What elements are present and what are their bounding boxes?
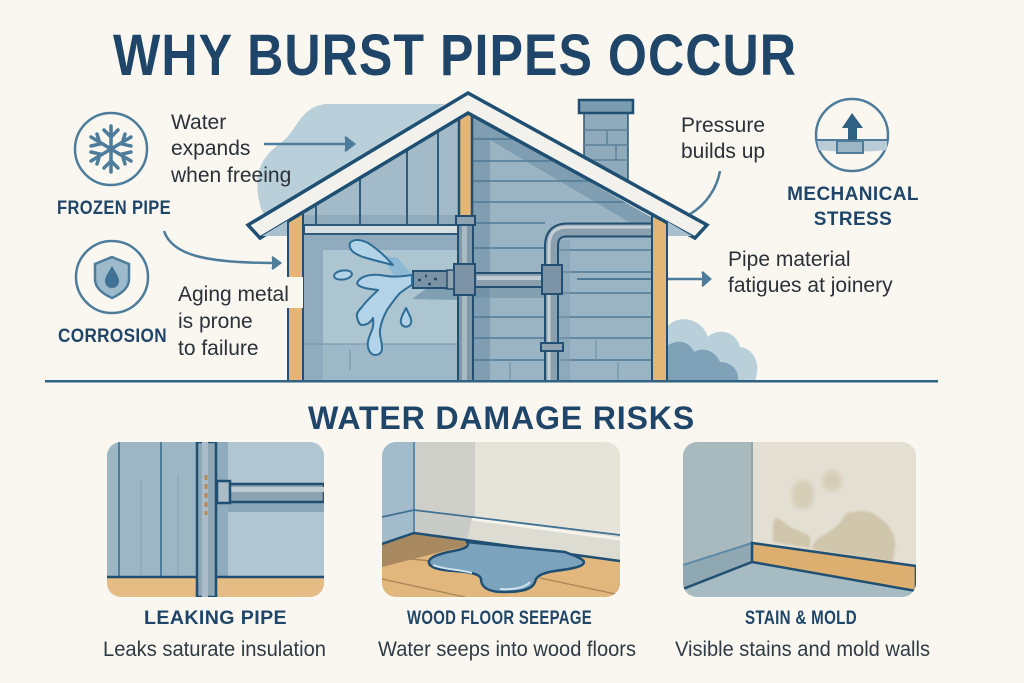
panel: leaking pipe [107, 442, 324, 597]
label: mechanical stress: STRESS [814, 209, 892, 230]
background cloud behind house [257, 104, 445, 218]
callout arrow: frozen pipe to wall [164, 231, 280, 269]
horizontal and elbow pipe [413, 227, 651, 381]
callout text: water expands: Water [171, 111, 226, 134]
left stud [288, 212, 303, 381]
callout text: pipe material: Pipe material [728, 248, 851, 271]
caption: wood floor seepage: Water seeps into wood floors [378, 638, 636, 661]
right stud [652, 216, 667, 381]
vertical pipe [454, 216, 475, 381]
panel: wood floor seepage [382, 442, 620, 597]
callout text: pressure builds up: builds up [681, 140, 765, 163]
panel: stain and mold [683, 442, 916, 597]
label: mechanical stress: MECHANICAL [787, 184, 919, 205]
label: frozen pipe: FROZEN PIPE [57, 198, 171, 219]
callout text: water expands: expands [171, 137, 250, 160]
callout arrow: water expands [264, 137, 354, 151]
left room wall [303, 233, 458, 381]
caption: stain and mold: Visible stains and mold walls [675, 638, 930, 661]
heading: water damage risks: WATER DAMAGE RISKS [308, 400, 695, 436]
callout text: aging metal: to failure [178, 337, 259, 360]
callout arrow: pressure [690, 171, 720, 214]
label: corrosion: CORROSION [58, 326, 167, 347]
wall gap behind aging metal label [276, 277, 303, 308]
label: leaking pipe: LEAKING PIPE [144, 608, 287, 629]
callout text: aging metal: is prone [178, 310, 253, 333]
wood floor [107, 578, 324, 597]
label: stain and mold: STAIN & MOLD [745, 608, 857, 629]
callout arrow: pipe material [668, 272, 710, 286]
shrub [667, 319, 757, 381]
callout text: aging metal: Aging metal [178, 283, 289, 306]
wood floor [382, 533, 620, 597]
icon: snowflake [75, 113, 147, 185]
callout text: pressure builds up: Pressure [681, 114, 765, 137]
center stud [459, 114, 472, 226]
house [248, 90, 707, 385]
icon: water burst [333, 240, 412, 355]
house walls [303, 113, 651, 381]
icon: mechanical stress [816, 99, 888, 171]
icon: corrosion shield [76, 241, 148, 313]
puddle [429, 542, 584, 592]
right side panels [472, 100, 651, 385]
ground line [45, 380, 938, 382]
attic studs [316, 130, 438, 224]
left attic [304, 122, 458, 215]
label: wood floor seepage: WOOD FLOOR SEEPAGE [407, 608, 592, 629]
caption: leaking pipe: Leaks saturate insulation [103, 638, 326, 661]
title: WHY BURST PIPES OCCUR [113, 23, 797, 88]
attic floor beam [304, 225, 458, 234]
roof [248, 93, 707, 238]
pipe [197, 442, 216, 597]
callout text: water expands: when freeing [170, 164, 291, 187]
mold stains [773, 470, 895, 562]
icon: chimney [579, 100, 633, 182]
callout text: pipe material: fatigues at joinery [728, 274, 893, 297]
